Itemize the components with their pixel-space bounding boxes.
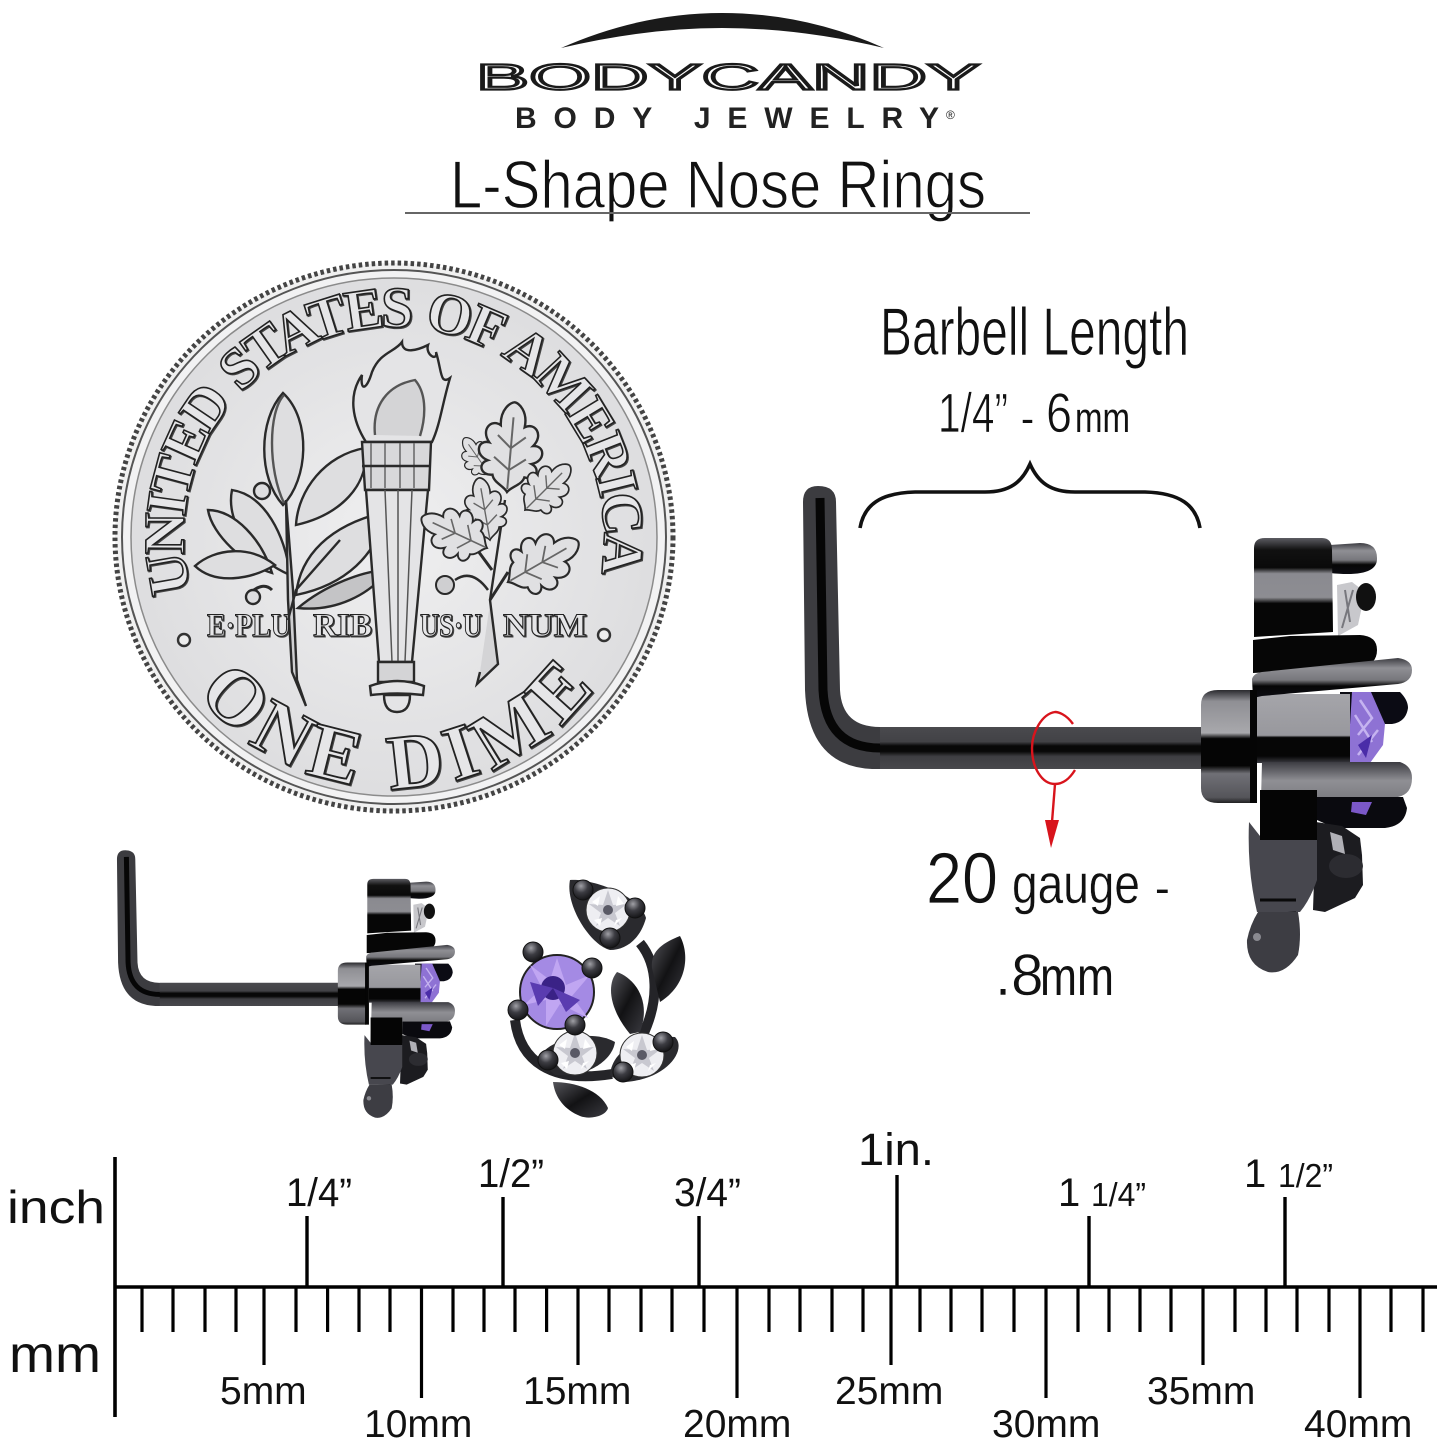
millimetre 5mm ticks — [264, 1287, 1203, 1365]
label: gauge: gauge — [1012, 852, 1140, 915]
purple gem — [520, 955, 594, 1029]
bottom right leaf — [610, 1037, 679, 1082]
millimetre labels: 25mm — [835, 1370, 943, 1413]
coin motto — [207, 608, 587, 644]
label: gauge mm: mm — [1040, 947, 1114, 1007]
coin motto: US·U — [420, 608, 482, 644]
bottom leaf — [553, 1082, 608, 1118]
millimetre labels: 10mm — [364, 1403, 472, 1445]
logo: Body Candy — [476, 13, 980, 135]
white gems — [586, 888, 630, 932]
coin reeded edge — [115, 263, 673, 811]
inch labels — [286, 1124, 1333, 1215]
coin text: One Dime: ONE DIME — [207, 658, 595, 792]
dime coin — [112, 260, 676, 814]
title underline — [405, 212, 1030, 214]
inch labels: 1 — [1058, 1171, 1080, 1215]
label: barbell length: Barbell Length — [880, 294, 1189, 370]
olive branch — [195, 393, 388, 706]
coin face — [131, 278, 657, 796]
millimetre labels — [220, 1370, 1412, 1445]
coin rim — [122, 270, 666, 804]
coin motto: E·PLU — [207, 608, 291, 644]
gauge arrow — [1045, 784, 1059, 848]
inch ticks — [307, 1175, 1285, 1287]
inch labels: 1/2” — [1278, 1157, 1333, 1194]
label: barbell size: mm — [1075, 394, 1130, 441]
inch labels: 3/4” — [674, 1171, 741, 1215]
label: gauge mm: .8 — [995, 943, 1043, 1008]
millimetre labels: 15mm — [523, 1370, 631, 1413]
small side-view ring — [117, 850, 455, 1118]
oak branch — [411, 400, 592, 684]
inch labels: 1/4” — [1091, 1176, 1146, 1213]
bottom middle leaf — [538, 1036, 615, 1075]
title: L-Shape Nose Rings — [450, 147, 986, 223]
millimetre labels: 5mm — [220, 1370, 307, 1413]
brace — [860, 464, 1200, 528]
millimetre labels: 20mm — [683, 1403, 791, 1445]
torch — [353, 342, 450, 712]
label: gauge: - — [1155, 864, 1170, 913]
stem — [515, 943, 655, 1076]
top bud leaf — [569, 880, 646, 950]
ruler — [7, 1124, 1437, 1445]
millimetre labels: 35mm — [1147, 1370, 1255, 1413]
logo arc — [561, 13, 884, 48]
millimetre minor ticks — [142, 1287, 1423, 1332]
front-view flower jewel — [508, 880, 685, 1118]
registered mark: ® — [946, 108, 955, 122]
label: barbell size: 1/4” — [938, 381, 1008, 444]
right leaf — [652, 936, 685, 1002]
millimetre labels: 30mm — [992, 1403, 1100, 1445]
prong balls — [508, 880, 673, 1082]
gauge marker — [1032, 712, 1075, 848]
coin motto: NUM — [503, 608, 587, 644]
label: barbell size — [938, 381, 1130, 444]
coin motto: RIB — [313, 608, 372, 644]
millimetre labels: 40mm — [1304, 1403, 1412, 1445]
millimetre 10mm ticks — [422, 1287, 1360, 1398]
logo wordmark: BODYCANDY — [476, 56, 980, 98]
label: gauge: 20 — [926, 839, 998, 919]
label: barbell size: - — [1021, 397, 1034, 441]
ruler unit: inch: inch — [7, 1181, 105, 1233]
logo tagline: BODY JEWELRY — [515, 102, 939, 135]
coin dots — [178, 629, 610, 646]
label: barbell size: 6 — [1046, 381, 1072, 444]
coin text: United States of America: UNITED STATES OF AMERICA — [144, 288, 644, 598]
label: gauge mm — [995, 943, 1114, 1008]
inch labels: 1in. — [858, 1124, 934, 1175]
inch labels: 1 — [1244, 1152, 1266, 1196]
large L-shape ring — [803, 486, 1412, 972]
center leaf — [611, 972, 644, 1034]
inch labels: 1/4” — [286, 1171, 352, 1215]
ruler axes — [115, 1157, 1437, 1417]
label: gauge — [926, 839, 1170, 919]
ruler unit: mm: mm — [9, 1326, 101, 1384]
inch labels: 1/2” — [478, 1152, 544, 1196]
